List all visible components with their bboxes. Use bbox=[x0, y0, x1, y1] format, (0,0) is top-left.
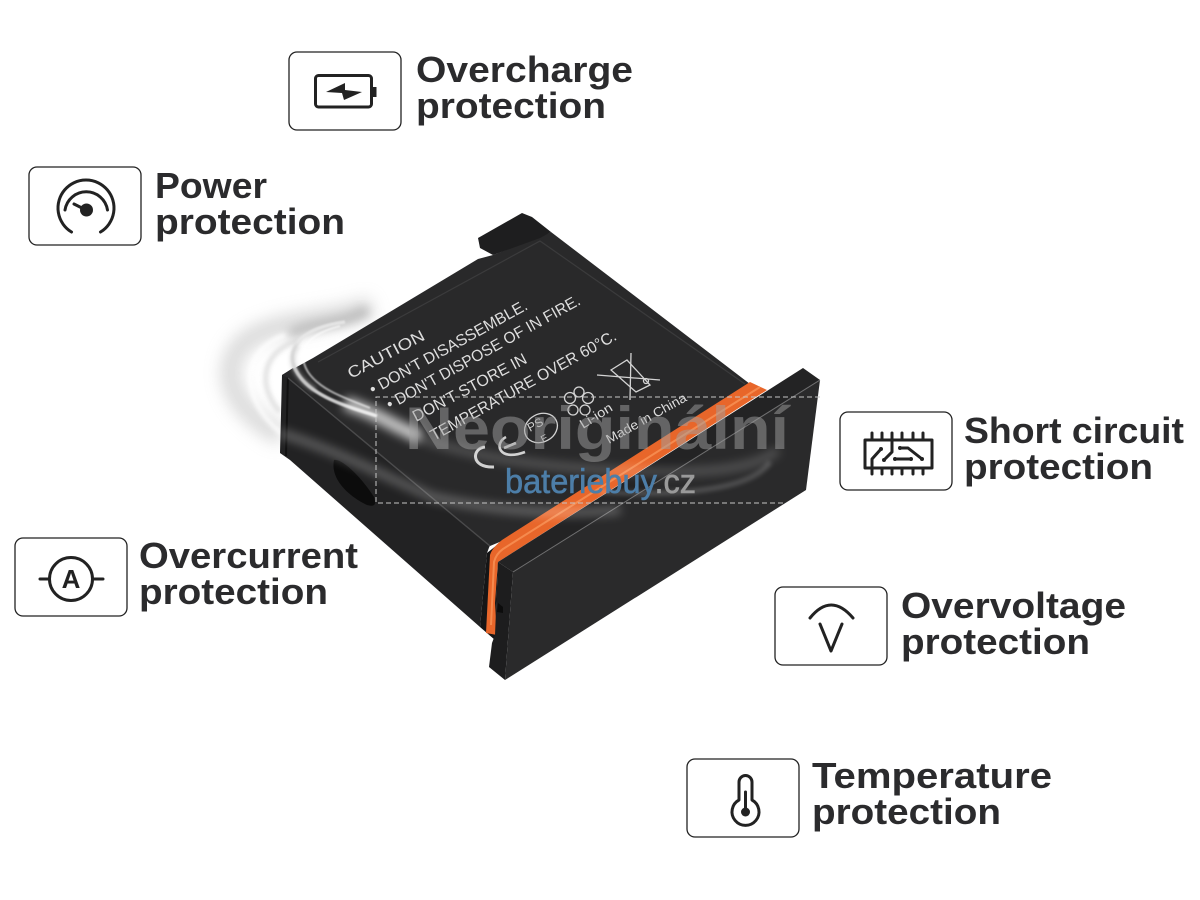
battery side left edge bbox=[286, 374, 288, 456]
label: Temperature bbox=[812, 755, 1052, 796]
label: protection bbox=[812, 791, 1001, 832]
item: overcurrent protection bbox=[15, 535, 358, 616]
icon box: thermometer bbox=[687, 759, 799, 837]
label: Overvoltage bbox=[901, 585, 1126, 626]
battery illustration bbox=[231, 213, 820, 680]
label bbox=[139, 535, 358, 612]
dark strip behind seal bbox=[480, 541, 502, 640]
charging port bbox=[333, 460, 375, 506]
label text on battery: Made in China bbox=[603, 389, 690, 447]
battery tab bbox=[478, 213, 551, 255]
item: overvoltage protection bbox=[775, 585, 1126, 665]
item: overcharge protection bbox=[289, 49, 633, 130]
battery side face bbox=[280, 368, 490, 627]
icon box: gauge bbox=[29, 167, 141, 245]
watermark dashed frame bbox=[376, 397, 820, 503]
battery end cap bbox=[489, 368, 820, 680]
label bbox=[901, 585, 1126, 662]
label text on battery: DON'T STORE IN bbox=[410, 351, 530, 426]
label text on battery: Li-ion bbox=[577, 400, 615, 432]
item: short circuit protection bbox=[840, 410, 1184, 490]
label: Overcharge bbox=[416, 49, 633, 90]
PSE mark: E bbox=[539, 433, 551, 446]
swirl over battery bbox=[280, 322, 778, 512]
battery top face bbox=[282, 232, 750, 546]
label bbox=[416, 49, 633, 126]
label: protection bbox=[139, 571, 328, 612]
label: Overcurrent bbox=[139, 535, 358, 576]
label text on battery: • DON'T DISPOSE OF IN FIRE. bbox=[384, 292, 583, 413]
label: protection bbox=[155, 201, 345, 242]
watermark bbox=[376, 395, 820, 503]
label: protection bbox=[901, 621, 1090, 662]
PSE mark: PS bbox=[525, 415, 546, 435]
label bbox=[155, 165, 345, 242]
orange seal bbox=[486, 382, 767, 635]
label text on battery: CAUTION bbox=[345, 328, 428, 383]
watermark text: bateriebuy.cz: bateriebuy.cz bbox=[505, 463, 696, 501]
swirl behind battery bbox=[231, 306, 372, 436]
icon box: circuit chip bbox=[840, 412, 952, 490]
icon box: voltage bbox=[775, 587, 887, 665]
label: Short circuit bbox=[964, 410, 1184, 451]
face edge highlight bbox=[318, 241, 745, 384]
PSE mark bbox=[519, 408, 563, 448]
crossed-out bin mark bbox=[597, 353, 660, 400]
icon box: ammeter bbox=[15, 538, 127, 616]
label text on battery: TEMPERATURE OVER 60°C. bbox=[428, 328, 620, 444]
watermark text: Neoriginální: Neoriginální bbox=[405, 395, 792, 462]
certification marks bbox=[475, 353, 660, 467]
label text on battery bbox=[345, 292, 690, 447]
icon box: ammeter: A bbox=[62, 564, 81, 594]
label: protection bbox=[416, 85, 606, 126]
label: Power bbox=[155, 165, 267, 206]
icon box: battery charge bbox=[289, 52, 401, 130]
recycling mark bbox=[564, 387, 594, 415]
label text on battery: • DON'T DISASSEMBLE. bbox=[367, 297, 531, 398]
label bbox=[964, 410, 1184, 487]
CE mark bbox=[475, 437, 525, 467]
item: temperature protection bbox=[687, 755, 1052, 837]
label: protection bbox=[964, 446, 1153, 487]
item: power protection bbox=[29, 165, 345, 245]
label bbox=[812, 755, 1052, 832]
